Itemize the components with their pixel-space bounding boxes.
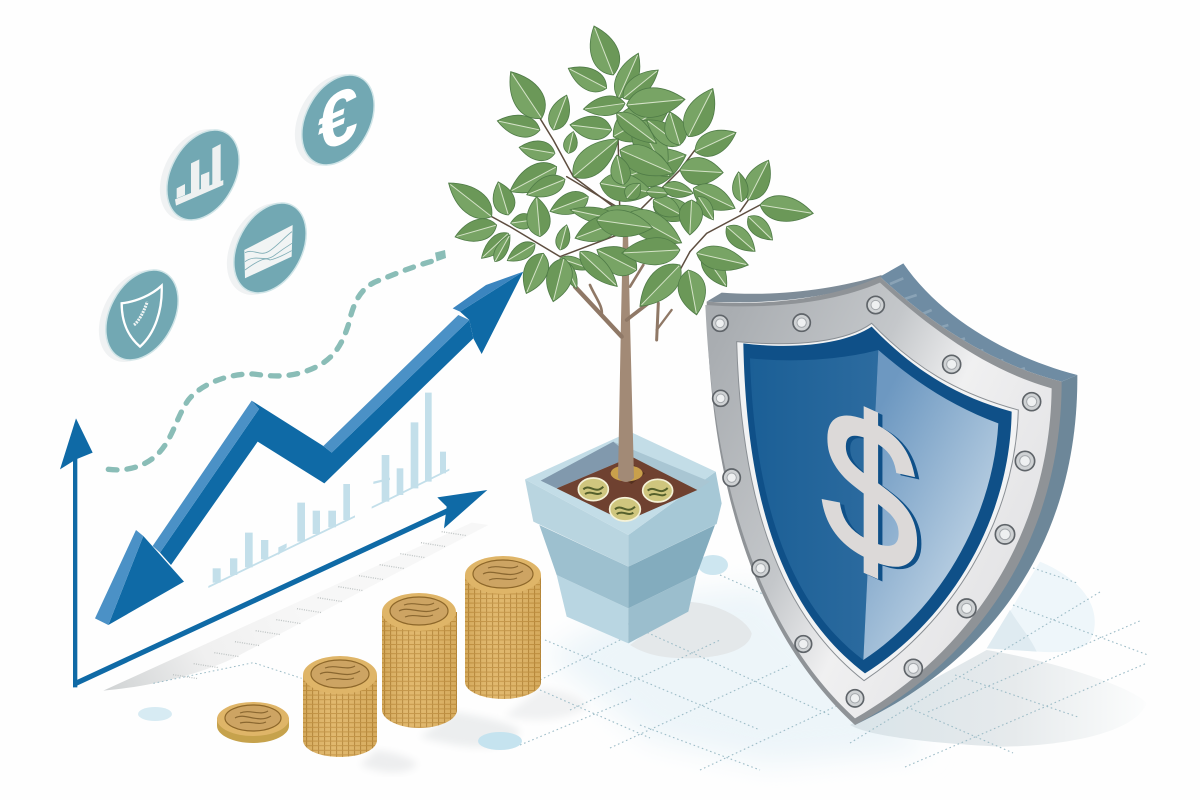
big zigzag arrow — [95, 272, 523, 625]
upper branches — [492, 77, 760, 270]
rivets — [712, 296, 1041, 707]
arrow body — [160, 320, 473, 565]
coin stack shadows — [505, 688, 586, 720]
soil coins — [578, 463, 673, 521]
floor shadows — [360, 562, 1147, 772]
shield right field — [863, 350, 998, 660]
coin stack 2 — [303, 656, 377, 757]
shield inner white edge — [737, 323, 1018, 681]
arrow left leg light strip — [153, 401, 259, 553]
pot shadow — [630, 602, 752, 658]
shield silver band — [705, 283, 1052, 718]
horizontal axis — [73, 508, 448, 687]
plant pot — [525, 432, 722, 643]
vertical axis arrowhead — [60, 418, 93, 469]
chart axes — [60, 418, 487, 687]
shield side depth — [855, 375, 1077, 725]
floor grid dotted lines — [520, 568, 1148, 770]
horizontal axis arrowhead — [437, 490, 487, 528]
lower branches — [575, 265, 678, 340]
dollar sign shadow: $ — [827, 360, 922, 626]
floor wash — [545, 585, 930, 765]
arrow lower head facet — [95, 530, 143, 625]
soil — [557, 457, 697, 522]
trunk — [618, 230, 634, 482]
bar chart small — [208, 484, 355, 588]
vertical axis — [73, 457, 77, 687]
shield rib marks — [890, 278, 1025, 373]
shield left field — [750, 350, 878, 660]
arrow upper head — [460, 272, 523, 354]
pot inner wall right — [613, 442, 710, 490]
pot rim top — [525, 432, 716, 535]
icon: bar chart disc — [145, 116, 254, 234]
shield — [705, 263, 1077, 725]
tree foliage — [441, 21, 815, 317]
pot rim left — [525, 479, 628, 567]
shield outer rim — [707, 277, 1062, 725]
coin single — [217, 702, 289, 743]
pot mid right — [628, 525, 715, 608]
arrow right leg light strip — [323, 315, 469, 453]
shield shadow — [850, 562, 1147, 747]
pale dotted band under axis — [103, 523, 488, 691]
shield ribbed top edge — [880, 263, 1077, 382]
icon: shield disc — [84, 257, 193, 375]
shield thin top strip — [707, 275, 882, 302]
pot rim right — [628, 472, 722, 567]
pot mid left — [539, 525, 628, 608]
arrow lower head — [108, 536, 184, 625]
tree trunk and branches — [492, 77, 760, 482]
shield dark blue border — [743, 327, 1012, 673]
bar chart large — [372, 393, 449, 509]
icon: euro disc — [280, 61, 389, 179]
pot inner wall left — [541, 442, 632, 488]
pot lower right — [628, 575, 697, 643]
icon: euro disc: € — [318, 68, 358, 171]
dollar sign: $ — [822, 358, 918, 624]
arrow upper head facet — [453, 272, 523, 312]
coin stack 4 — [465, 556, 541, 699]
icon: line chart disc — [212, 190, 321, 308]
coin stack 3 — [382, 593, 457, 728]
blue floor dots — [138, 555, 728, 750]
rivet highlights — [716, 300, 1037, 703]
pot lower left — [557, 575, 628, 643]
dashed teal trend curve — [108, 250, 446, 470]
